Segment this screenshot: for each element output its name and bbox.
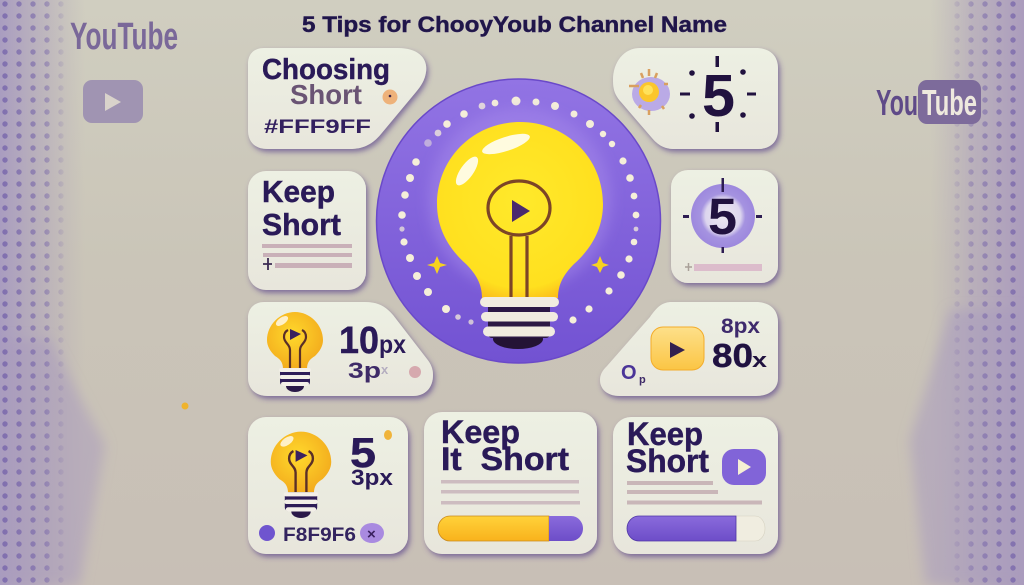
plus mark (263, 258, 272, 270)
panel: ring 5 (671, 170, 778, 283)
sparkle right (591, 256, 609, 273)
ticks (683, 178, 762, 253)
small unit: 8px (721, 315, 760, 338)
unit: px (379, 331, 406, 359)
central bulb disc (376, 79, 660, 363)
bulb glass (437, 122, 603, 298)
heading: Keep (262, 174, 335, 209)
purple dot (259, 525, 275, 541)
YouTube logo left (70, 16, 178, 123)
hex code: #FFF9FF (264, 117, 371, 138)
hex code: F8F9F6 (283, 525, 356, 546)
panel: choosing short (248, 48, 426, 149)
panel: 5px (248, 417, 408, 554)
orange speck (182, 402, 188, 410)
orange dot (384, 430, 392, 440)
orange dot (382, 90, 398, 104)
heading line 2: Short (262, 207, 341, 242)
value: 5 (708, 188, 737, 245)
pink dot (409, 366, 421, 378)
dot ring (398, 96, 639, 325)
icon: bulb (271, 432, 331, 518)
faint mark (685, 263, 692, 271)
value: 80 (712, 337, 753, 374)
play triangle (512, 200, 530, 222)
value: 5 (702, 63, 735, 129)
text lines (441, 480, 580, 504)
dark bulb tip (493, 329, 543, 349)
screw base (480, 297, 559, 338)
heading line 2: Short (626, 443, 709, 479)
text lines (627, 481, 762, 504)
heading: Keep (627, 416, 703, 452)
panel: 80px (600, 302, 778, 396)
small o: O (621, 362, 637, 384)
YouTube logo right: Tube (922, 82, 977, 123)
heading: Choosing (262, 54, 390, 86)
sub value: 3p (348, 358, 381, 383)
panel: keep it short (424, 412, 597, 554)
sparkle left (427, 256, 447, 274)
title: 5 Tips for ChooyYoub Channel Name (302, 12, 727, 37)
icon: play button (651, 327, 704, 370)
purple disc (376, 79, 660, 363)
panel: keep short (248, 171, 366, 290)
ticks (680, 56, 756, 132)
heading: Keep (441, 414, 520, 450)
value: 10 (339, 320, 379, 362)
progress bar (438, 516, 583, 541)
close badge: × (367, 526, 376, 543)
panel: 10px (248, 302, 433, 396)
icon: bulb (267, 312, 323, 392)
icon: sun (629, 69, 670, 115)
subheading: Short (290, 79, 362, 110)
close badge (360, 523, 384, 543)
icon: purple play (722, 449, 766, 485)
bulb glow (428, 108, 612, 292)
heading line 2: It Short (441, 441, 569, 477)
faded unit: x (381, 362, 389, 377)
YouTube logo left: YouTube (70, 16, 178, 58)
ring (691, 184, 755, 248)
YouTube logo right: You (876, 82, 918, 123)
value: 5 (350, 429, 376, 476)
progress bar (627, 516, 765, 541)
pink line (694, 264, 762, 271)
panel: sun 5 (613, 48, 778, 149)
YouTube logo right (876, 80, 981, 124)
unit: 3px (351, 465, 394, 490)
text lines (262, 244, 352, 268)
filament (488, 181, 550, 297)
bulb highlights (452, 130, 532, 189)
small p: p (639, 374, 646, 386)
panel: keep short with play (613, 416, 778, 554)
value unit: x (752, 350, 767, 372)
